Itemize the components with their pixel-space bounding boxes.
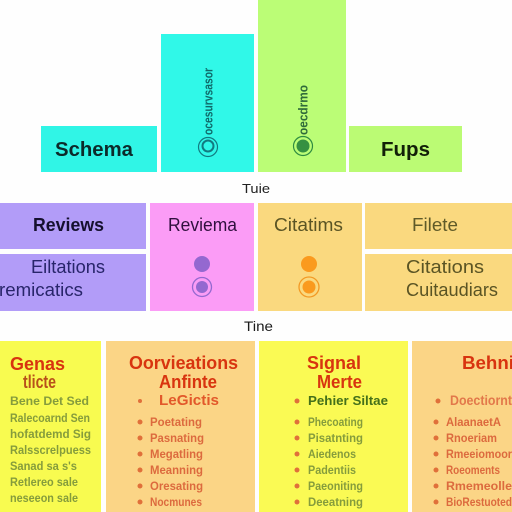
panel: observations: Megatling (150, 447, 203, 461)
panel: reviews heading (0, 203, 146, 249)
panel: behni: Roeoments (446, 463, 500, 477)
panel: genas: tlicte (23, 372, 56, 392)
panel: observations: Oresating (150, 479, 203, 493)
panel: genas: Sanad sa s's (10, 459, 77, 473)
panel: signal: Pisatnting (308, 431, 363, 445)
panel: signal: Paeoniting (308, 479, 363, 493)
panel: behni: AlaanaetA (446, 415, 501, 429)
panel: genas: neseeon sale (10, 491, 78, 505)
panel: signal: Aiedenos (308, 447, 356, 461)
middle row (0, 203, 512, 311)
panel: genas: Retlereo sale (10, 475, 78, 489)
top row chart (41, 0, 462, 172)
panel: yellow citations list: Cuitaudiars (406, 280, 498, 300)
panel: genas: Ralecoarnd Sen (10, 411, 90, 425)
panel: signal: Pehier Siltae (308, 393, 388, 408)
panel: purple citations: Eiltations (31, 257, 105, 277)
panel: signal: Signal (307, 353, 361, 373)
axis label: top: Tuie (242, 181, 270, 196)
panel: observations: Nocmunes (150, 495, 202, 509)
panel: signal: Deeatning (308, 495, 363, 509)
panel: observations: Meanning (150, 463, 203, 477)
panel: genas: Genas (10, 354, 65, 374)
panel: observations: Oorvieations (129, 353, 238, 373)
panel: filete (365, 203, 512, 249)
panel: pink reviews: Reviema (168, 215, 238, 235)
panel: rups: Fups (381, 139, 430, 161)
panel: observations: Anfinte (159, 372, 217, 392)
panel: yellow citations list: Citations (406, 257, 484, 277)
panel: genas: Bene Det Sed (10, 394, 89, 408)
panel: yellow citations (258, 203, 362, 311)
panel: observations (106, 341, 255, 512)
panel: tall cyan bar (161, 34, 254, 172)
panel: rups (349, 126, 462, 172)
panel: purple citations (0, 254, 146, 311)
panel: tall green bar (258, 0, 346, 172)
panel: behni: Rnoeriam (446, 431, 497, 445)
panel: observations: LeGictis (159, 392, 219, 409)
panel: pink reviews (150, 203, 254, 311)
icon: orange dot (301, 256, 317, 272)
panel: purple citations: remicatics (0, 280, 83, 300)
icon: purple dot (194, 256, 210, 272)
panel: genas (0, 341, 101, 512)
panel: tall green bar: oecdrmo (296, 85, 310, 135)
icon: orange ring (299, 277, 319, 297)
panel: genas: hofatdemd Sig (10, 427, 91, 441)
panel: tall cyan bar: ocesurvsasor (202, 68, 216, 135)
panel: signal: Padentiis (308, 463, 356, 477)
panel: schema: Schema (55, 139, 134, 161)
panel: behni (412, 341, 512, 512)
panel: reviews heading: Reviews (33, 215, 104, 235)
bottom row (0, 341, 512, 512)
panel: observations: Pasnating (150, 431, 204, 445)
panel: behni: Behni (462, 353, 512, 373)
panel: signal: Merte (317, 372, 362, 392)
panel: schema (41, 126, 157, 172)
panel: observations: Poetating (150, 415, 202, 429)
panel: yellow citations: Citatims (274, 215, 343, 235)
icon: purple ring (192, 278, 212, 296)
panel: signal (259, 341, 408, 512)
panel: behni: Rmemeolle (446, 479, 512, 493)
panel: filete: Filete (412, 215, 458, 235)
panel: genas: Ralsscrelpuess (10, 443, 91, 457)
axis label: middle: Tine (244, 318, 273, 334)
panel: signal: Phecoating (308, 415, 363, 429)
panel: yellow citations list (365, 254, 512, 311)
